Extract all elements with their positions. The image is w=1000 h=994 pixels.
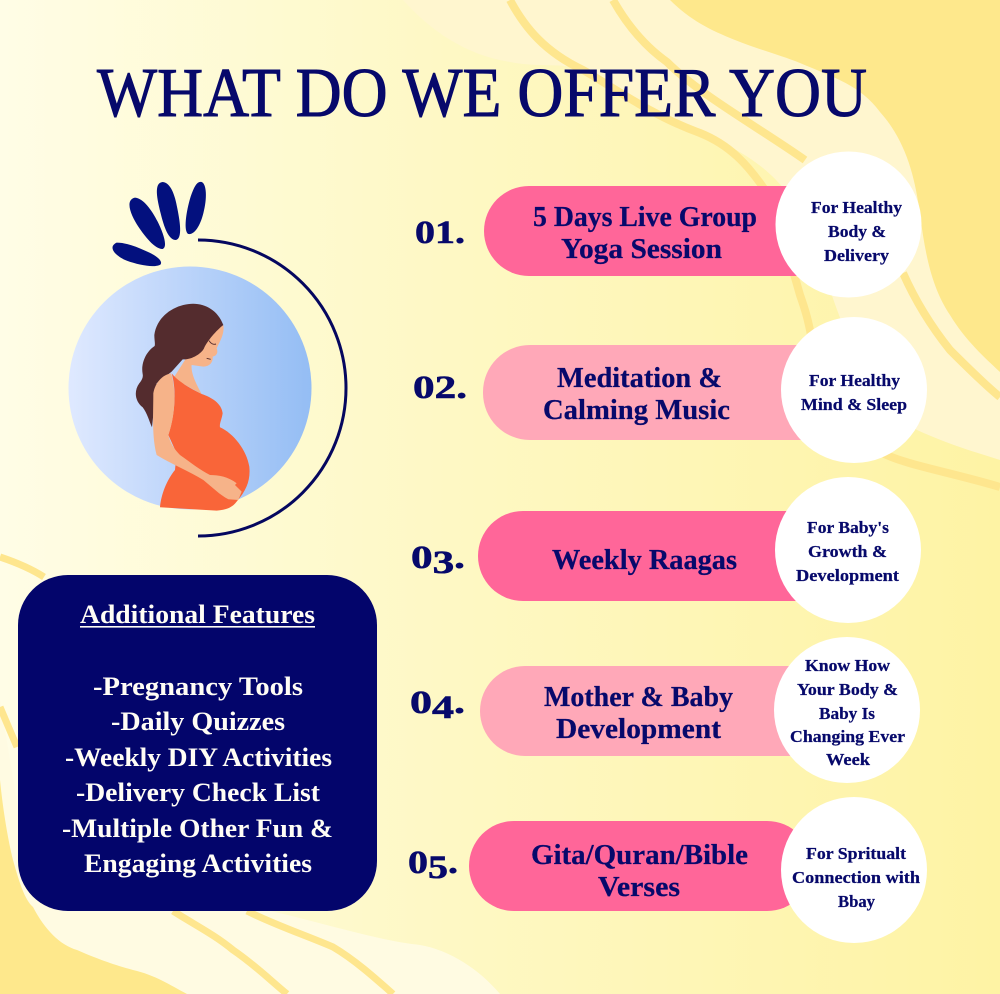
feature list: -Pregnancy Tools bbox=[93, 672, 303, 701]
circle text: Connection with bbox=[792, 868, 921, 887]
circle text: For Healthy bbox=[811, 198, 903, 217]
circle bbox=[775, 477, 921, 623]
circle text: Changing Ever bbox=[790, 727, 905, 746]
circle text: For Baby's bbox=[807, 518, 889, 537]
circle text: Your Body & bbox=[797, 680, 898, 699]
panel heading: Additional Features bbox=[80, 600, 315, 629]
illustration: pregnant woman bbox=[68, 182, 346, 536]
row 5: verses bbox=[408, 797, 927, 943]
number 01: 01. bbox=[415, 215, 465, 251]
circle text: Development bbox=[796, 566, 899, 585]
circle text: Body & bbox=[828, 222, 886, 241]
row 1: yoga bbox=[415, 152, 922, 298]
woman figure bbox=[136, 304, 250, 511]
feature list: Engaging Activities bbox=[84, 849, 312, 878]
circle text: Mind & Sleep bbox=[801, 395, 907, 414]
feature list: -Weekly DIY Activities bbox=[65, 743, 332, 772]
number 05: . bbox=[448, 845, 458, 881]
number 04: . bbox=[454, 685, 465, 721]
pill text: Gita/Quran/Bible bbox=[531, 839, 748, 871]
number 03: 0 bbox=[411, 540, 428, 576]
pill text bbox=[531, 839, 748, 903]
pill text: Calming Music bbox=[543, 394, 730, 426]
pill text: Meditation & bbox=[557, 362, 722, 394]
pill text: Verses bbox=[598, 871, 680, 903]
number 05: 5 bbox=[428, 850, 448, 886]
pill bbox=[483, 345, 848, 440]
pill text bbox=[544, 681, 733, 745]
pill bbox=[480, 666, 840, 756]
pill text: Yoga Session bbox=[561, 233, 722, 265]
circle text: Know How bbox=[805, 656, 891, 675]
number 03: 3 bbox=[433, 545, 454, 581]
panel: additional features bbox=[18, 575, 377, 911]
number 04: 0 bbox=[410, 685, 426, 721]
number 04: 4 bbox=[432, 690, 454, 726]
row 3: raagas bbox=[411, 477, 921, 623]
pill text: Development bbox=[556, 713, 721, 745]
number 05: 0 bbox=[408, 845, 424, 881]
circle text bbox=[792, 844, 921, 911]
circle text: For Healthy bbox=[809, 371, 901, 390]
pill text: Weekly Raagas bbox=[552, 544, 737, 576]
circle text bbox=[811, 198, 903, 265]
feature list: -Daily Quizzes bbox=[111, 707, 285, 736]
pill text: Mother & Baby bbox=[544, 681, 733, 713]
title: WHAT DO WE OFFER YOU bbox=[97, 55, 867, 132]
arc bbox=[198, 240, 346, 536]
circle text: Baby Is bbox=[819, 704, 875, 723]
circle text bbox=[801, 371, 907, 414]
pill text: 5 Days Live Group bbox=[533, 201, 757, 233]
pill bbox=[469, 821, 812, 911]
number 03: . bbox=[454, 540, 465, 576]
circle text: Growth & bbox=[808, 542, 887, 561]
circle text: Delivery bbox=[824, 246, 890, 265]
circle text bbox=[796, 518, 899, 585]
circle bbox=[776, 152, 922, 298]
feature list: -Delivery Check List bbox=[76, 778, 320, 807]
feature list: -Multiple Other Fun & bbox=[62, 814, 333, 843]
row 2: meditation bbox=[413, 317, 927, 463]
circle text: For Spritualt bbox=[806, 844, 906, 863]
circle text: Bbay bbox=[838, 892, 875, 911]
circle bbox=[781, 797, 927, 943]
circle bbox=[774, 637, 920, 783]
number 02: 02. bbox=[413, 370, 467, 406]
icon: petals bbox=[113, 182, 206, 266]
pill text bbox=[543, 362, 730, 426]
circle bbox=[781, 317, 927, 463]
blue circle bbox=[68, 266, 312, 510]
pill text bbox=[533, 201, 757, 265]
circle text bbox=[790, 656, 905, 769]
feature list bbox=[62, 672, 333, 878]
pill bbox=[478, 511, 843, 601]
pill bbox=[484, 186, 844, 276]
circle text: Week bbox=[826, 750, 871, 769]
row 4: development bbox=[410, 637, 920, 783]
